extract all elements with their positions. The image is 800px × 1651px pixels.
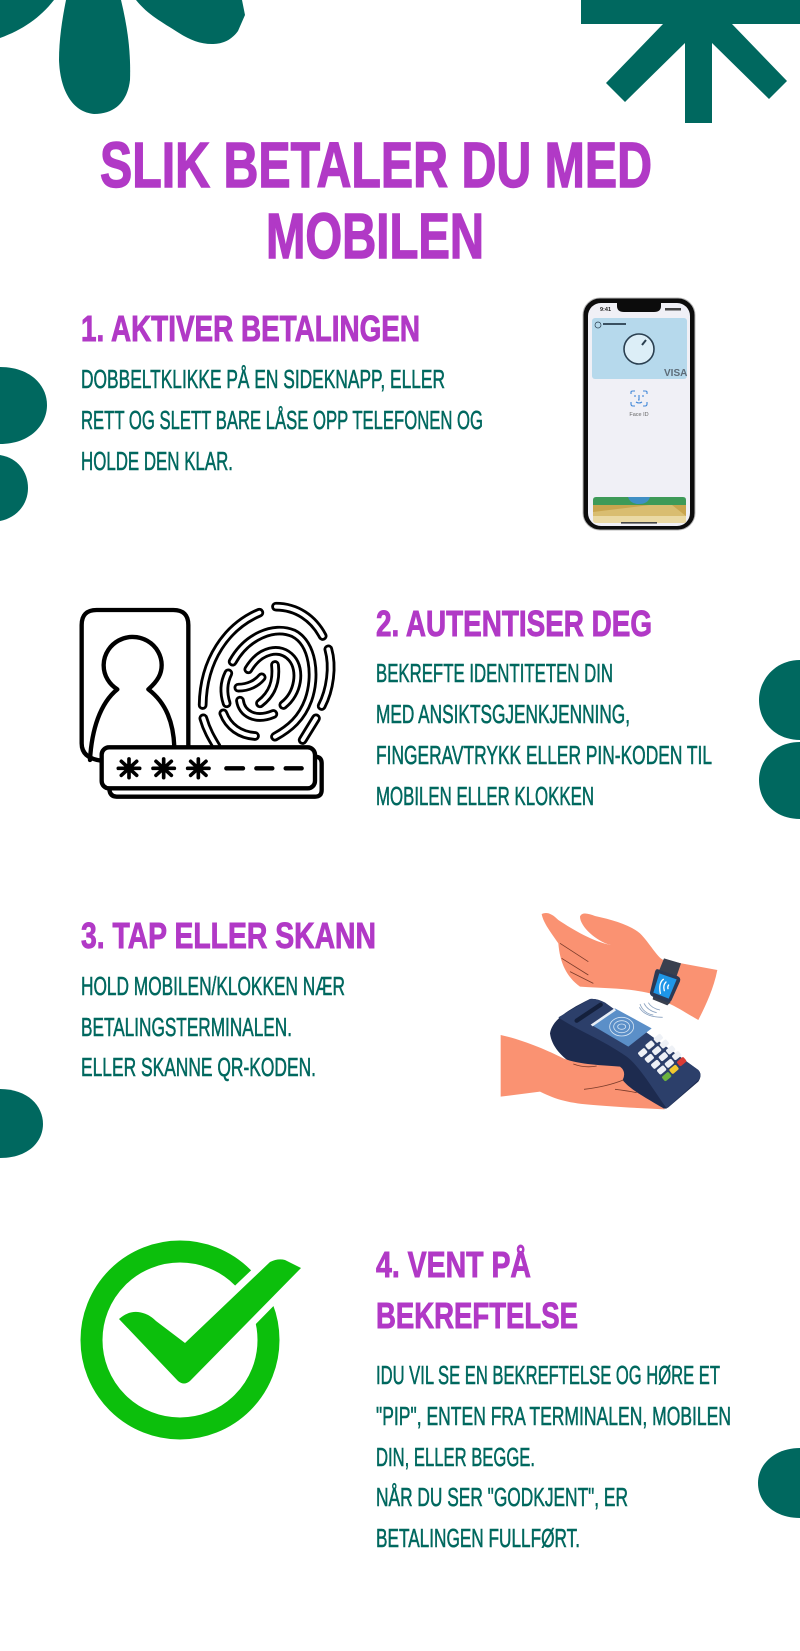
body: step 4: NÅR DU SER "GODKJENT", ER — [376, 1482, 628, 1512]
title: MOBILEN — [266, 200, 484, 272]
panel: step 3 text — [81, 915, 376, 1082]
decoration: left blob lower — [0, 455, 28, 521]
icon: phone with wallet card: 9:41 — [600, 307, 611, 313]
body: step 2: MOBILEN ELLER KLOKKEN — [376, 781, 594, 811]
heading: step 4 — [376, 1244, 578, 1336]
fingerprint — [203, 607, 331, 747]
body: step 1: HOLDE DEN KLAR. — [81, 446, 233, 476]
keypad — [637, 1033, 687, 1082]
wallet card: VISA — [664, 368, 687, 379]
icon: phone with wallet card: Face ID — [629, 412, 649, 418]
icon: phone with wallet card — [583, 298, 695, 530]
decoration: right blob upper — [759, 660, 800, 740]
panel: step 2 text — [376, 603, 712, 811]
smartwatch — [650, 958, 681, 1005]
decoration: top-right asterisk — [581, 0, 800, 123]
decoration: right blob lower — [759, 742, 800, 819]
heading: step 4: 4. VENT PÅ — [376, 1244, 531, 1285]
heading: step 2: 2. AUTENTISER DEG — [376, 603, 652, 644]
face id symbol — [631, 391, 647, 406]
id portrait — [82, 610, 188, 761]
panel: step 4 text — [376, 1244, 731, 1553]
decoration: top-left flower petals — [0, 0, 245, 114]
icon: watch tapping a payment terminal — [501, 913, 717, 1109]
decoration: right blob bottom — [758, 1448, 800, 1518]
body: step 4: DIN, ELLER BEGGE. — [376, 1442, 535, 1472]
body: step 1: DOBBELTKLIKKE PÅ EN SIDEKNAPP, ELLER — [81, 364, 445, 394]
decoration: left blob bottom — [0, 1089, 43, 1158]
terminal body — [550, 999, 700, 1109]
body: step 2: MED ANSIKTSGJENKJENNING, — [376, 699, 630, 729]
pin code bar — [102, 747, 322, 797]
heading: step 4: BEKREFTELSE — [376, 1295, 578, 1336]
heading: step 3: 3. TAP ELLER SKANN — [81, 915, 376, 956]
body: step 1 — [81, 364, 483, 476]
body: step 3 — [81, 971, 345, 1082]
stacked cards — [593, 497, 686, 523]
body: step 2 — [376, 658, 712, 811]
lower hand — [501, 1035, 665, 1109]
body: step 3: HOLD MOBILEN/KLOKKEN NÆR — [81, 971, 345, 1001]
wallet card — [592, 318, 687, 379]
heading: step 1: 1. AKTIVER BETALINGEN — [81, 308, 420, 349]
body: step 3: BETALINGSTERMINALEN. — [81, 1012, 292, 1042]
decoration: left blob upper — [0, 367, 47, 444]
body: step 1: RETT OG SLETT BARE LÅSE OPP TELEFONEN OG — [81, 405, 483, 435]
title — [100, 129, 652, 272]
contactless waves — [639, 1003, 663, 1017]
body: step 4: BETALINGEN FULLFØRT. — [376, 1523, 580, 1553]
body: step 3: ELLER SKANNE QR-KODEN. — [81, 1052, 316, 1082]
panel: step 1 text — [81, 308, 483, 476]
icon: id card, fingerprint and pin code — [82, 607, 331, 797]
body: step 2: BEKREFTE IDENTITETEN DIN — [376, 658, 613, 688]
icon: green check mark — [92, 1252, 301, 1428]
body: step 4 — [376, 1360, 731, 1553]
upper hand — [542, 913, 717, 1020]
